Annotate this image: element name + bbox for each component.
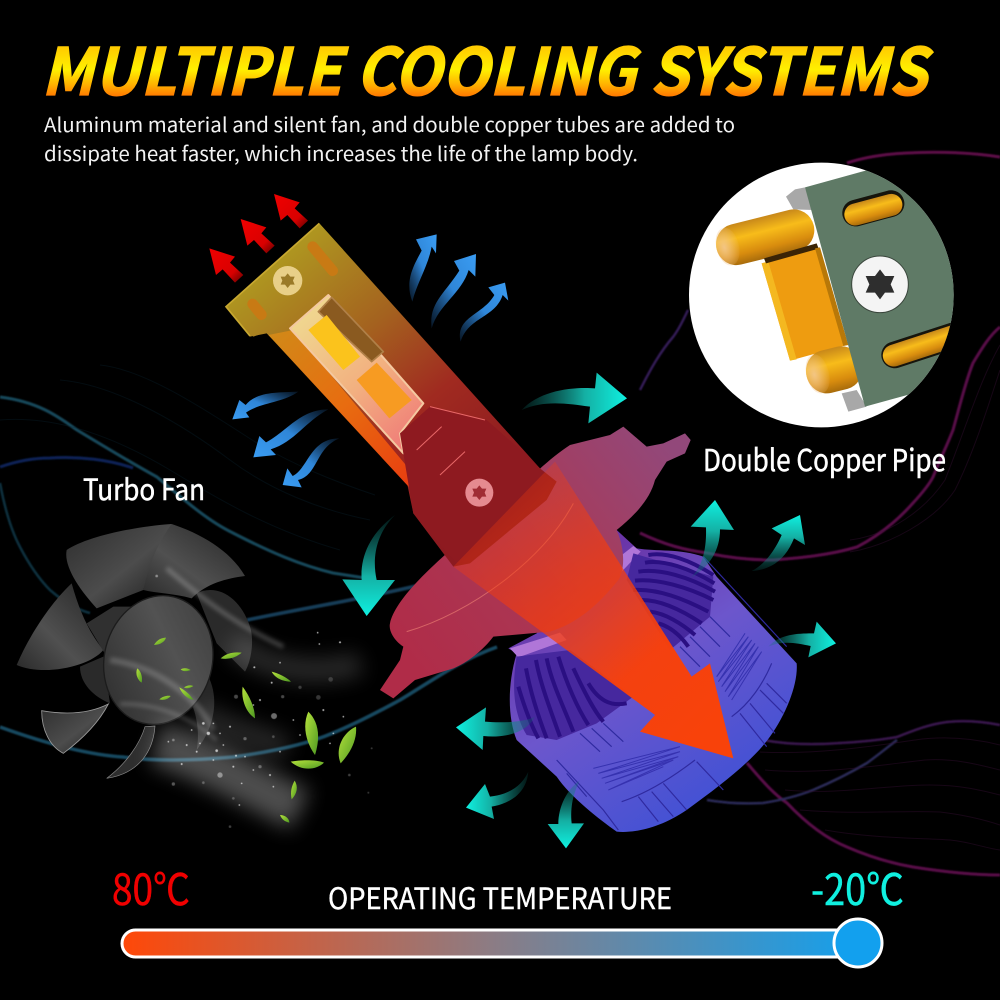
torx screw: [852, 256, 908, 313]
label: double copper pipe: Double Copper Pipe: [703, 436, 946, 480]
teal airflow arrows around heat sink: [456, 500, 836, 848]
background hatch lines: [760, 345, 1000, 850]
screw lower: [465, 479, 493, 507]
leaves: [136, 638, 356, 823]
LED chip lower: [357, 363, 412, 418]
intro text: Aluminum material and silent fan, and double copper tubes are added to: [44, 109, 735, 138]
bulb heat sink base: [508, 530, 797, 832]
red heat arrows: [209, 194, 308, 283]
intro text: dissipate heat faster, which increases the life of the lamp body.: [44, 138, 638, 167]
label: minus 20 degrees: -20℃: [811, 856, 904, 918]
label: turbo fan: Turbo Fan: [83, 467, 205, 509]
cooling fins: [518, 554, 715, 738]
teal airflow arrow left: [342, 515, 395, 616]
blue airflow arrows down-left: [232, 392, 339, 487]
inset: double copper pipe close-up: [689, 163, 981, 427]
copper block: [762, 248, 847, 361]
housing slits: [417, 407, 485, 475]
turbo fan illustration: [17, 524, 373, 828]
LED chip upper: [308, 315, 360, 370]
dust particles: [155, 575, 373, 828]
blue airflow arrows up: [409, 234, 508, 342]
upper copper pin: [716, 209, 814, 266]
plate slot upper: [842, 190, 904, 226]
title: MULTIPLE COOLING SYSTEMS: [41, 20, 934, 114]
air stream: [110, 568, 360, 810]
green plate: [805, 170, 954, 407]
big red heat-flow arrow: [453, 462, 733, 758]
LED window: [290, 295, 423, 453]
gray plate tabs: [786, 187, 867, 412]
intro text: [44, 109, 735, 167]
background wave curves: [0, 152, 1000, 875]
fan blades: [17, 524, 252, 778]
slider bar: [122, 930, 860, 957]
teal airflow arrow top: [522, 373, 627, 423]
rib lines: [557, 557, 787, 830]
lower copper pin: [806, 346, 858, 394]
fan hub: [90, 584, 226, 736]
label: 80 degrees: 80℃: [112, 856, 190, 918]
operating temperature scale: [112, 856, 904, 967]
bulb flange: [380, 427, 691, 698]
arm lower housing: [400, 407, 553, 563]
lamp arm: [226, 223, 557, 567]
zigzag mesh: [593, 633, 762, 790]
screw upper: [273, 266, 302, 295]
window cover: [318, 297, 383, 362]
plate slot lower: [881, 322, 951, 368]
slider knob: [834, 919, 882, 967]
mounting plate: [226, 223, 343, 337]
bulb body: [226, 223, 797, 832]
label: operating temperature: OPERATING TEMPERATURE: [328, 876, 672, 918]
fin shadow areas: [514, 553, 713, 740]
plate slots: [253, 247, 333, 315]
